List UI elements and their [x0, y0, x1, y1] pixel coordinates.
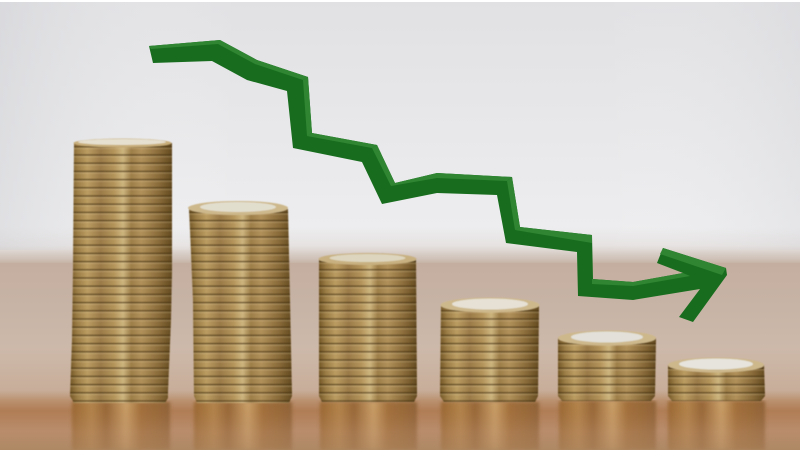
wall background — [0, 0, 800, 264]
coin stack 3 — [318, 253, 417, 402]
arrow lighter top and side edges — [149, 40, 726, 286]
coin stack 5 — [558, 330, 656, 401]
coin stack 1 — [70, 138, 172, 403]
coin reflections on table — [72, 401, 765, 450]
coin stack 4 — [440, 298, 540, 402]
coin stack 6 — [668, 358, 765, 401]
green falling arrow — [149, 40, 727, 322]
coin stack 2 — [188, 201, 292, 403]
wooden table — [0, 263, 800, 450]
